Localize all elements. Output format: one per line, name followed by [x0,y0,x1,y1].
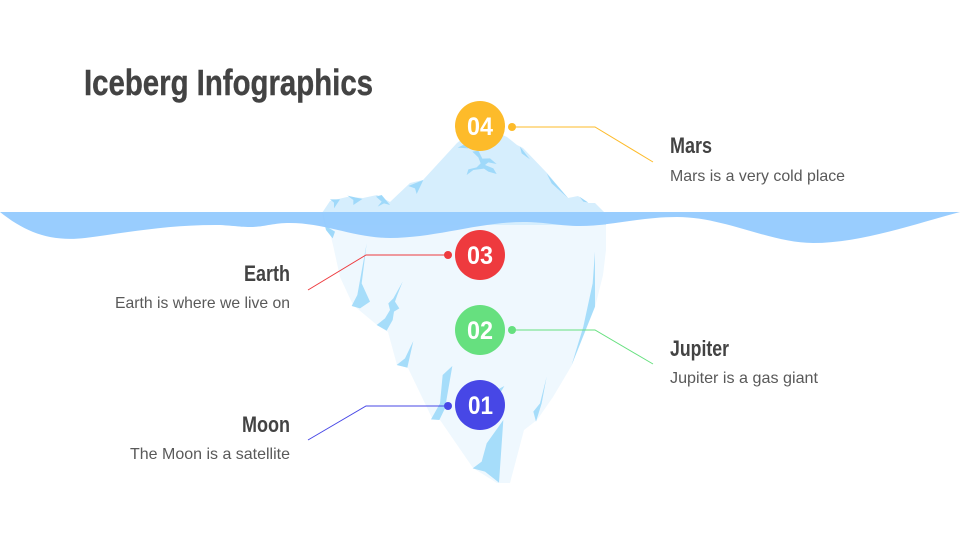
badge 01 [455,380,505,430]
iceberg: upper facets [323,143,588,238]
badge 04: 04 [467,113,493,141]
badge 04 [455,101,505,151]
text block: Mars: Mars is a very cold place [670,168,845,185]
callout: Moon connector [308,402,452,440]
callout: Earth connector [308,251,452,290]
iceberg: above water [322,125,606,240]
title: Iceberg Infographics [84,62,373,103]
text block: Jupiter: Jupiter [670,336,729,361]
water band [0,212,960,243]
text block: Jupiter [670,336,819,387]
badge 02 [455,305,505,355]
callout: Jupiter connector [508,326,653,364]
badge 02: 02 [467,317,493,345]
callout: Mars connector [508,123,653,162]
text block: Mars: Mars [670,133,712,158]
badge 03: 03 [467,242,493,270]
text block: Moon: The Moon is a satellite [130,446,290,463]
text block: Earth: Earth [244,261,290,286]
badge 01: 01 [468,392,493,420]
text block: Earth: Earth is where we live on [115,295,290,312]
text block: Mars [670,133,845,185]
text block: Moon [130,412,290,463]
text block: Moon: Moon [242,412,290,437]
iceberg: lower facets [352,243,595,483]
badge 03 [455,230,505,280]
iceberg [322,125,606,483]
text block: Earth [115,261,290,312]
iceberg: below water [328,225,606,483]
text block: Jupiter: Jupiter is a gas giant [670,370,819,387]
